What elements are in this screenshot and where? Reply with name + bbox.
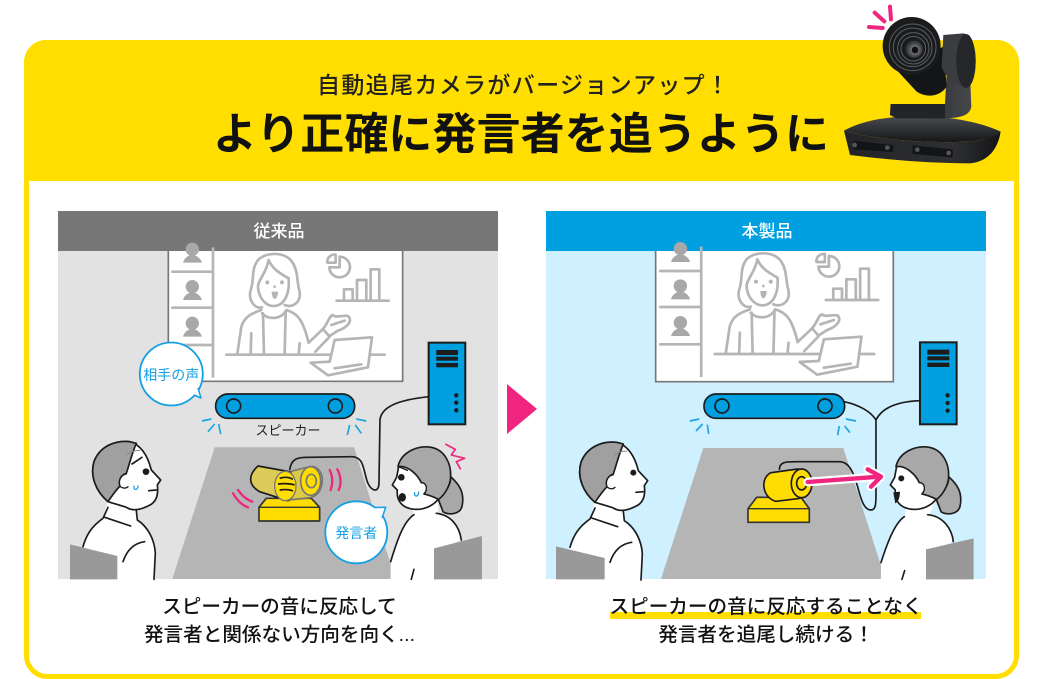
panel background [546, 251, 986, 579]
product photo: webcam [844, 7, 1001, 163]
speaker sound ticks [202, 419, 366, 435]
chair [556, 546, 605, 579]
speaker sound ticks [690, 419, 856, 435]
computer tower [429, 343, 465, 424]
tab heading: this product: 本製品 [742, 222, 792, 241]
cable [290, 397, 429, 490]
arrow: gaze to speaker [808, 469, 881, 487]
speaker label: スピーカー [255, 423, 321, 438]
tab heading: this product [546, 211, 986, 251]
camera turning the wrong way [233, 466, 340, 521]
person: woman at right [881, 447, 974, 579]
speech bubble: remote voice [140, 342, 203, 406]
speaker bar [704, 394, 845, 418]
video call screen [168, 243, 403, 381]
caption: this product [610, 596, 922, 646]
table [172, 447, 395, 579]
caption: conventional: 発言者と関係ない方向を向く... [144, 624, 415, 646]
speech bubble: speaker [325, 501, 387, 563]
panel: this product [546, 211, 986, 646]
camera tracking speaker [748, 469, 812, 522]
main heading: より正確に発言者を追うように [213, 110, 829, 159]
chair [926, 538, 974, 579]
speech bubble: remote voice: 相手の声 [143, 367, 199, 383]
video call screen [656, 242, 893, 382]
person: woman at right [391, 444, 482, 579]
speech bubble: speaker: 発言者 [335, 525, 377, 541]
caption: conventional [144, 596, 415, 646]
table [661, 448, 885, 579]
tab heading: conventional: 従来品 [254, 222, 304, 241]
person: man at left [556, 442, 648, 580]
accent ticks [869, 7, 891, 28]
caption: conventional: スピーカーの音に反応して [162, 596, 397, 618]
caption: this product: 発言者を追尾し続ける！ [658, 624, 874, 646]
person: man at left [70, 441, 161, 579]
cables [779, 401, 920, 510]
speaker bar [216, 394, 355, 418]
motion marks [233, 469, 340, 507]
panel: conventional product [58, 211, 498, 646]
chair [70, 544, 117, 579]
arrow between panels [507, 384, 537, 434]
subtitle: 自動追尾カメラがバージョンアップ！ [317, 72, 729, 98]
highlight [610, 612, 921, 619]
tab heading: conventional [58, 211, 498, 251]
computer tower [920, 342, 957, 424]
caption: this product: スピーカーの音に反応することなく [610, 596, 922, 618]
chair [434, 536, 482, 579]
panel background [58, 251, 498, 579]
